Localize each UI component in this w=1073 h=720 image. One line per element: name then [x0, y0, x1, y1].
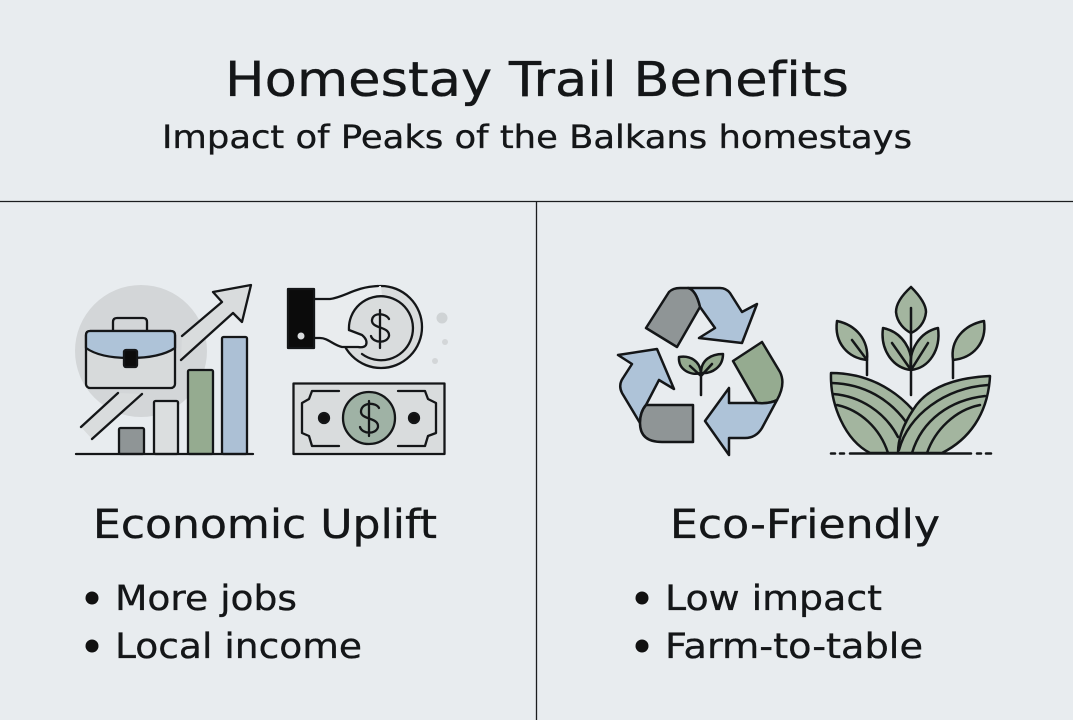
heading: eco-friendly: Eco-Friendly: [670, 502, 940, 548]
icon: plant on field: [831, 287, 991, 454]
bullet list: eco-friendly: [636, 579, 923, 667]
heading: economic uplift: Economic Uplift: [93, 502, 437, 548]
icon: hand holding coin: [288, 286, 448, 368]
icon: briefcase and growth chart: [75, 285, 253, 454]
panel: eco-friendly: [618, 287, 991, 667]
bullet list: eco-friendly: Farm-to-table: [665, 627, 923, 667]
panel: economic uplift: [75, 285, 448, 667]
bullet list: economic uplift: [86, 579, 362, 667]
title: Homestay Trail Benefits: [225, 52, 849, 108]
bullet list: eco-friendly: Low impact: [665, 579, 882, 619]
bullet list: economic uplift: Local income: [115, 627, 362, 667]
icon: banknote: [294, 384, 444, 454]
bullet list: economic uplift: More jobs: [115, 579, 297, 619]
subtitle: Impact of Peaks of the Balkans homestays: [162, 118, 912, 156]
icon: recycling arrows with sprout: [618, 288, 782, 455]
